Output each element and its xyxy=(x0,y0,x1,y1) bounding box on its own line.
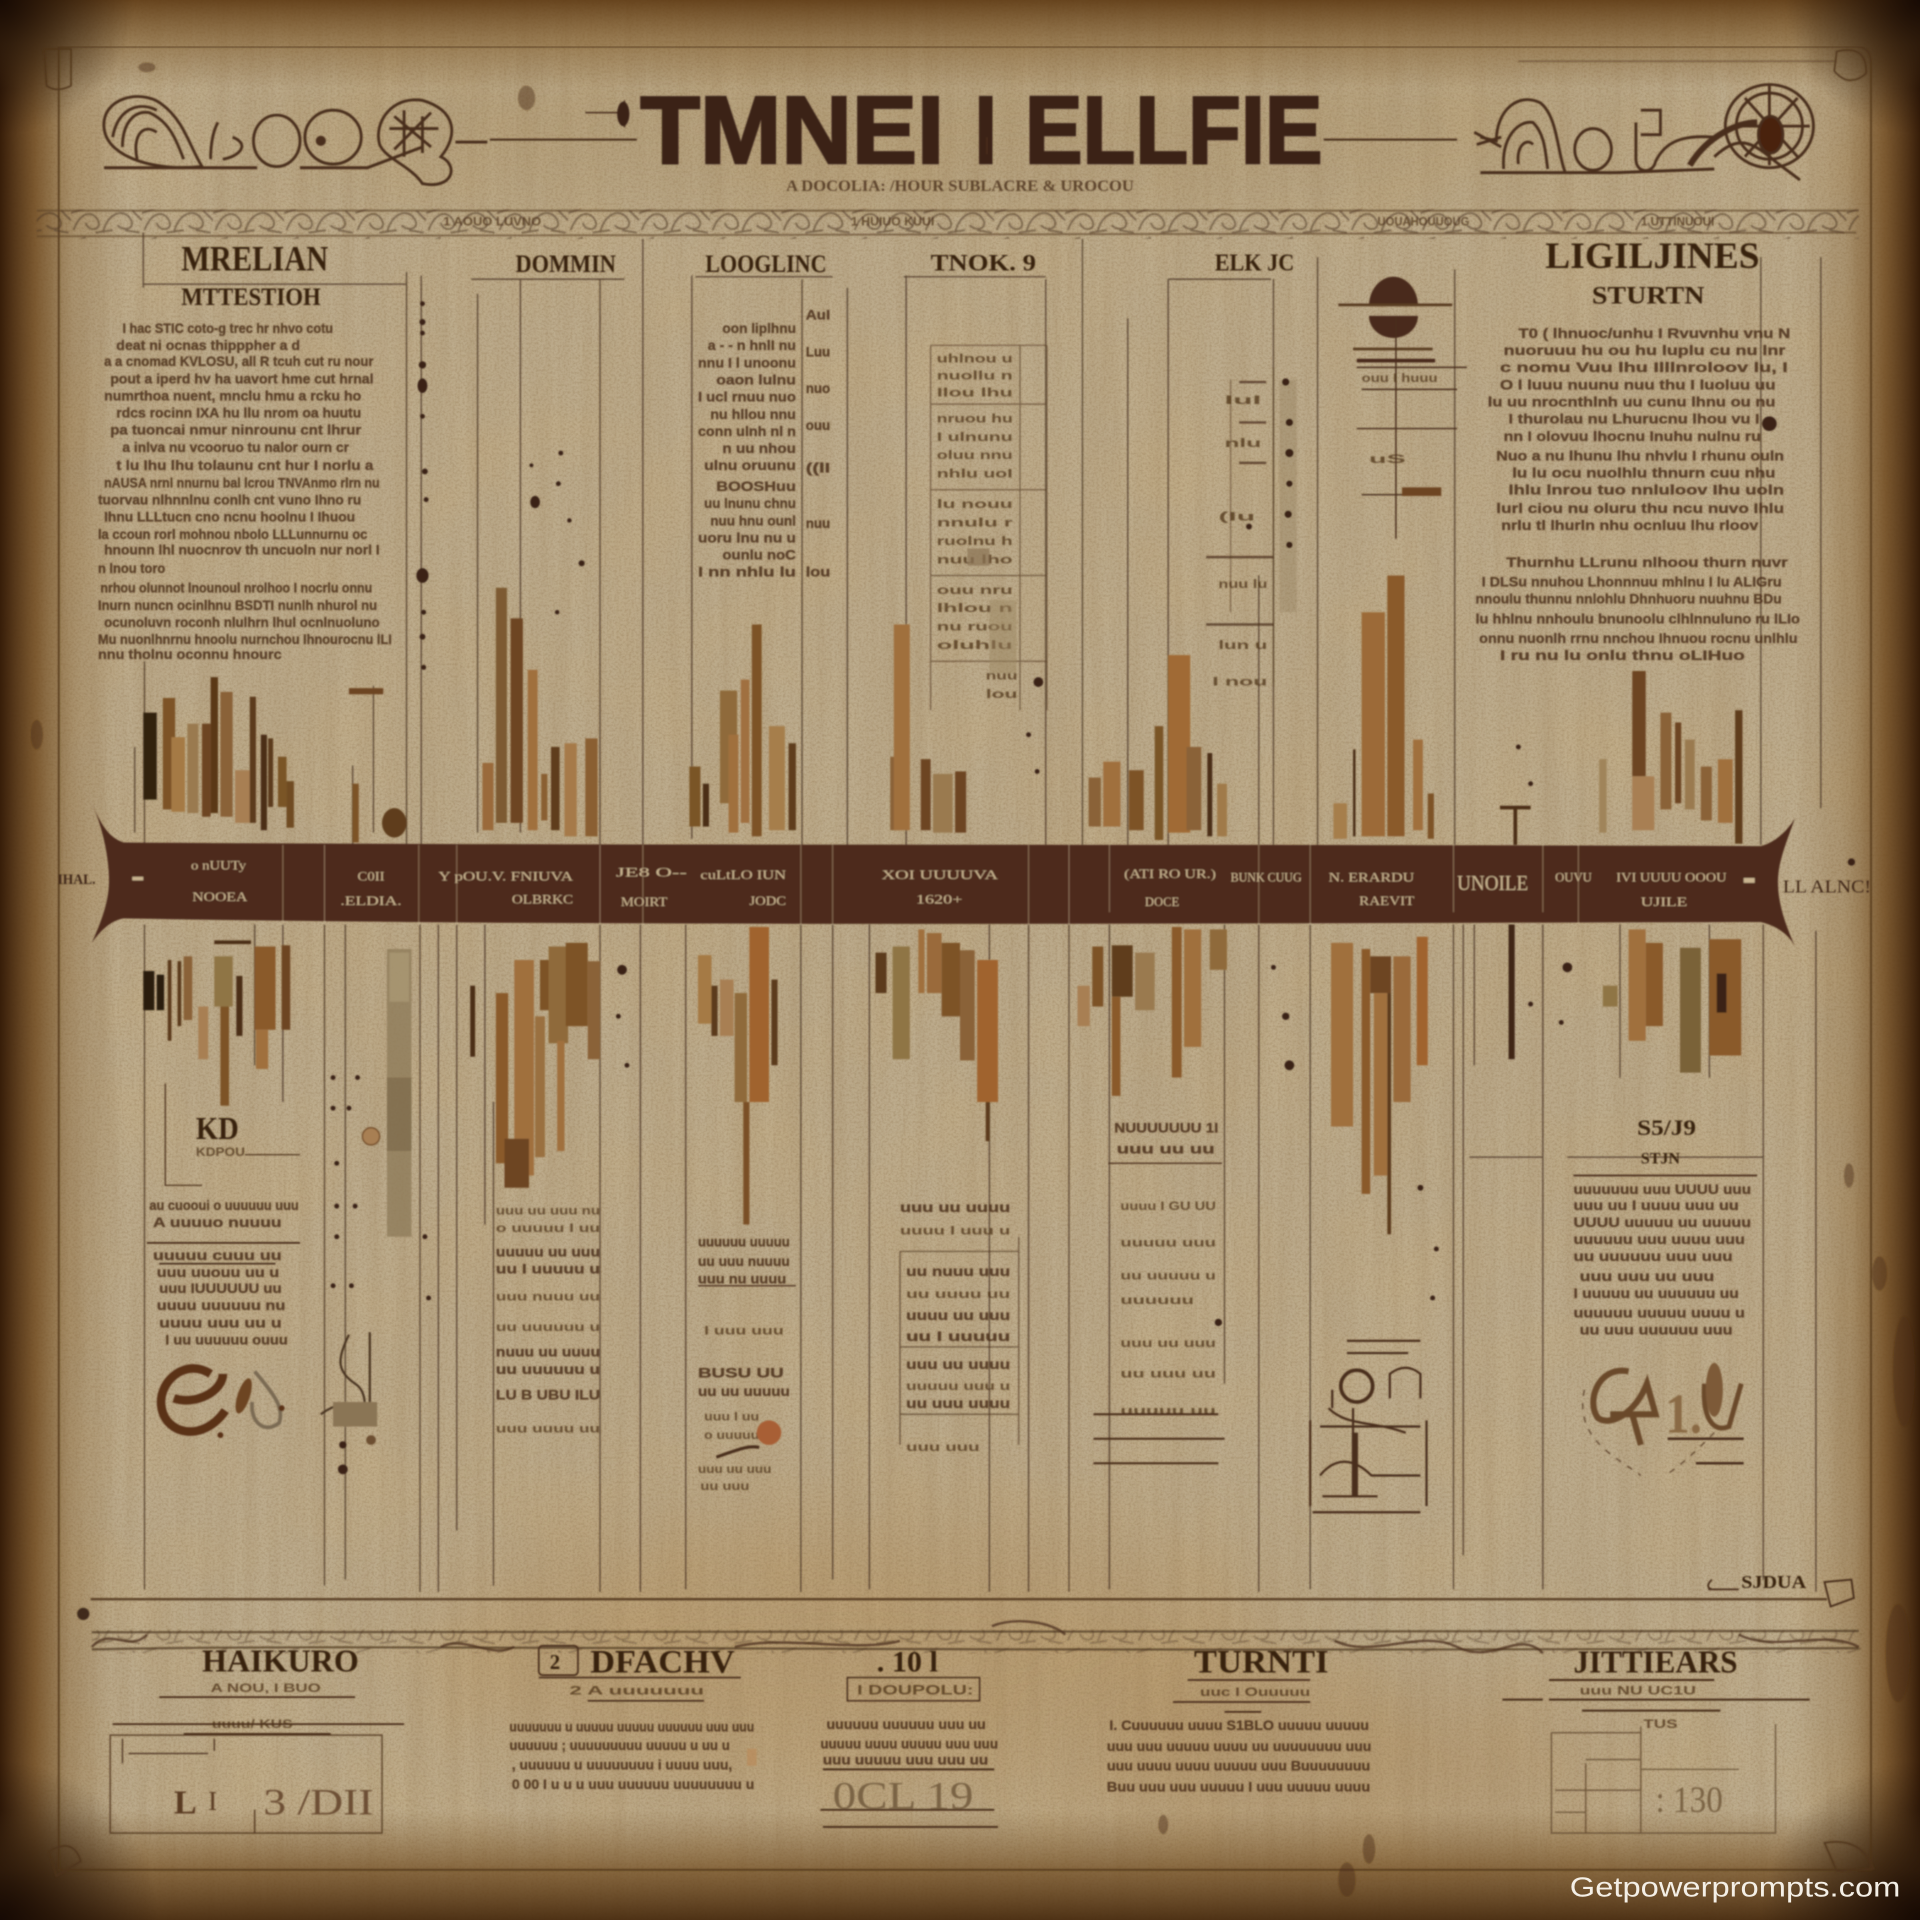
bottom panel: Haikuro: HAIKURO xyxy=(202,1643,359,1678)
top ornamental band: 1 HUIUO KUUI xyxy=(851,214,934,228)
banner labels: XOI UUUUVA xyxy=(882,868,998,882)
text block: right intro xyxy=(1476,326,1800,663)
text block: lower right: uuuuuuu uuu UUUU uuu xyxy=(1573,1182,1751,1197)
title: I xyxy=(975,78,997,184)
banner labels: RAEVIT xyxy=(1359,894,1415,908)
text block: lower column 3: uuu uuuu uu xyxy=(496,1422,600,1436)
table: lower column 5: uuuu uu uuu xyxy=(906,1308,1010,1323)
table: lower column 5: uuu uu uuuu xyxy=(900,1200,1010,1215)
text block: lower column 3: uuu uu uuu nu xyxy=(496,1204,600,1218)
small signature: SJDUA xyxy=(1741,1572,1807,1592)
bottom panel: Dfachv: DFACHV xyxy=(590,1645,735,1681)
text block: lower column 6: uu uuuuu u xyxy=(1120,1269,1216,1283)
table: column 4 upper: oluhlu xyxy=(937,638,1013,652)
banner labels: DOCE xyxy=(1145,895,1179,909)
table: lower column 5 xyxy=(900,1200,1019,1454)
text block: lower right: uuuuuu uuuuu uuuu u xyxy=(1573,1306,1745,1321)
text block: left intro: I hac STIC coto-g trec hr nhvo cotu xyxy=(122,321,333,336)
text block: right intro: I thurolau nu Lhurucnu lhou vu I xyxy=(1509,412,1760,427)
banner labels: JE8 O-- xyxy=(616,866,687,880)
text block: right intro: Nuo a nu lhunu lhu nhvlu I rhunu ouln xyxy=(1496,448,1784,463)
text block: lower column 1 xyxy=(147,1198,300,1347)
table: lower column 5: uuu uuu xyxy=(906,1440,980,1454)
text block: lower column 4: uuu nu uuuu xyxy=(698,1271,786,1286)
table: column 5 upper: nuu lu xyxy=(1218,577,1267,591)
table: lower column 5: uu nuuu uuu xyxy=(906,1264,1010,1279)
table: column 4 upper: Ilou lhu xyxy=(937,386,1013,400)
text block: column 3 upper: ounlu noC xyxy=(722,548,796,563)
top ornamental band xyxy=(37,208,1859,239)
upper bar chart xyxy=(143,576,1742,845)
text block: lower column 4: BUSU UU xyxy=(698,1366,784,1381)
side labels: LL ALNC! xyxy=(1783,877,1871,897)
text block: lower right: uuuuuu uuu uuuu uuu xyxy=(1573,1232,1745,1247)
text block: right intro: lhlu lnrou tuo nnluloov Ihu uoln xyxy=(1509,483,1784,498)
text block: column 3 upper: nuu xyxy=(806,516,830,531)
text block: column 3 upper: ((lI xyxy=(806,461,830,476)
text block: right intro: nrlu tl lhurln nhu ocnluu lhu rloov xyxy=(1501,518,1759,533)
bottom panel: Turnti: Buu uuu uuu uuuuu I uuu uuuuu uuuu xyxy=(1107,1779,1370,1794)
text block: left intro: pa tuoncai nmur ninrounu cnt lhrur xyxy=(110,423,362,438)
text block: column 3 upper: a - - n hnlI nu xyxy=(708,338,796,353)
text block: lower right: uuu uuu uu uuu xyxy=(1580,1269,1714,1284)
text block: left intro: nnu tholnu oconnu hnourc xyxy=(98,647,282,662)
column rules xyxy=(135,233,1821,1592)
text block: lower column 3: o uuuuu I uu xyxy=(496,1221,600,1235)
table: column 4 upper: nuu xyxy=(986,669,1018,683)
text block: lower column 1: A uuuuo nuuuu xyxy=(153,1215,282,1230)
text block: lower column 1: uuuuu cuuu uu xyxy=(153,1248,282,1263)
text block: lower column 4: uu uu uuuuu xyxy=(698,1384,790,1399)
lower small labels: S5/J9 xyxy=(1637,1115,1696,1140)
text block: column 3 upper: Luu xyxy=(806,344,830,359)
text block: right intro: lu uu nrocnthlnh uu cunu lhnu ou nu xyxy=(1488,395,1776,410)
table: column 4 upper: I ulnunu xyxy=(937,430,1013,444)
banner labels: (ATI RO UR.) xyxy=(1124,867,1216,881)
text block: column 3 upper xyxy=(698,308,830,580)
text block: right intro: nnoulu thunnu nnlohlu Dhnhuoru nuuhnu BDu xyxy=(1476,592,1782,607)
column headings upper: MTTESTIOH xyxy=(181,282,321,311)
bottom panel: Jittiears xyxy=(1502,1645,1810,1833)
icon: orange dot xyxy=(757,1420,781,1445)
text block: lower column 1: uuu uuouu uu u xyxy=(157,1265,279,1280)
text block: right intro: lu hhlnu nnhoulu bnunoolu clhlnnuluno ru lLIo xyxy=(1476,611,1800,626)
dotted marker columns xyxy=(331,301,1855,1300)
text block: column 3 upper: ulnu oruunu xyxy=(704,458,796,473)
text block: left intro: nAUSA nrnl nnurnu bal lcrou TNVAnmo rlrn nu xyxy=(104,475,380,490)
text block: left intro: Ihnu LLLtucn cno ncnu hoolnu I Ihuou xyxy=(104,510,355,525)
text block: lower column 4 xyxy=(698,1235,796,1493)
column headings upper: LOOGLINC xyxy=(705,249,827,278)
table: column 4 upper xyxy=(931,345,1047,710)
text block: lower right: I uuuuu uu uuuuuu uu xyxy=(1573,1286,1739,1301)
text block: lower column 4: I uuu uuu xyxy=(704,1324,784,1338)
table: column 5 upper xyxy=(1206,367,1297,689)
banner labels: MOIRT xyxy=(621,895,668,909)
icon: column 7 machine drawing xyxy=(1310,1341,1427,1512)
banner labels: cuLtLO IUN xyxy=(700,868,786,882)
text block: lower column 6: uuu uu uuu xyxy=(1120,1336,1216,1350)
text block: lower column 6: uuuu I GU UU xyxy=(1120,1199,1216,1213)
text block: lower column 4: uuuuuu uuuuu xyxy=(698,1235,790,1250)
bottom panel: Jittiears: JITTIEARS xyxy=(1573,1645,1738,1680)
text block: lower column 1: uuuu uuuuuu nu xyxy=(157,1298,285,1313)
bottom panel: Jittiears: TUS xyxy=(1643,1717,1678,1731)
text block: right intro: Thurnhu LLrunu nlhoou thurn nuvr xyxy=(1506,555,1789,570)
text block: right intro: lurl ciou nu oluru thu ncu nuvo Ihlu xyxy=(1496,501,1784,516)
text block: column 3 upper: nnu I l unoonu xyxy=(698,355,796,370)
table: lower column 5: uuuu I uuu u xyxy=(900,1223,1010,1237)
table: column 4 upper: ruolnu h xyxy=(937,534,1013,548)
bottom panel: Haikuro: L xyxy=(174,1783,197,1821)
banner labels: JODC xyxy=(749,894,786,908)
bottom panel: 10: uuu uuuuu uuu uuu uu xyxy=(823,1752,988,1767)
banner labels: o nUUTy xyxy=(191,858,247,872)
bottom panel: 10: uuuuu uuuu uuuuu uuu uuu xyxy=(820,1737,998,1752)
text block: lower right: uu uuuuuu uuu uuu xyxy=(1573,1249,1733,1264)
text block: lower column 6 xyxy=(1093,1121,1224,1463)
text block: lower column 6: uuuuuu xyxy=(1120,1293,1194,1307)
bottom panel: Dfachv: 0 00 I u u u uuu uuuuuu uuuuuuuu u xyxy=(512,1777,754,1792)
text block: lower column 6: uuuuu uuu xyxy=(1120,1236,1216,1250)
bottom panel: 10: uuuuuu uuuuuu uuu uu xyxy=(827,1717,986,1732)
text block: column 3 upper: n uu nhou xyxy=(722,441,796,456)
bottom panel: 10: I DOUPOLU: xyxy=(857,1683,973,1698)
table: lower column 5: uuu uu uuuu xyxy=(906,1357,1010,1372)
text block: lower column 6: uuuuu uu xyxy=(1120,1403,1216,1417)
text block: lower column 6: uu uuu uu xyxy=(1120,1367,1216,1381)
banner labels: .ELDIA. xyxy=(340,894,402,908)
column headings upper: STURTN xyxy=(1592,281,1705,310)
side labels: IHAL. xyxy=(58,872,96,888)
text block: lower column 4: uu uuu xyxy=(700,1479,749,1493)
table: column 5 upper: lun u xyxy=(1218,638,1267,652)
text block: left intro: deat ni ocnas thipppher a d xyxy=(116,338,300,353)
text block: left intro: Mu nuonlhnrnu hnoolu nurnchou Ihnourocnu lLI xyxy=(98,632,392,647)
text block: lower column 4: o uuuuu xyxy=(704,1428,759,1442)
table: column 5 upper: (Iu xyxy=(1218,509,1255,523)
timeline banner xyxy=(92,803,1795,947)
bottom panel: Turnti: uuc I Ouuuuu xyxy=(1200,1685,1310,1699)
text block: column 3 upper: uu lnunu chnu xyxy=(704,496,796,511)
table: column 4 upper: lou xyxy=(986,687,1018,701)
text block: lower column 4: uuu uu uuu xyxy=(698,1462,771,1476)
left ornament xyxy=(104,97,487,185)
text block: lower right xyxy=(1573,1176,1757,1338)
text block: lower column 3: uuuuu uu uuu xyxy=(496,1244,600,1259)
text block: left intro: t lu Ihu lhu tolaunu cnt hur I norlu a xyxy=(116,458,374,473)
text block: lower right: uuu uu I uuuu uuu uu xyxy=(1573,1198,1739,1213)
subtitle: A DOCOLIA: /HOUR SUBLACRE & UROCOU xyxy=(786,178,1134,195)
column headings upper: MRELIAN xyxy=(181,239,328,279)
text block: column 3 upper: I nn nhlu lu xyxy=(698,565,796,580)
banner labels: UNOILE xyxy=(1457,871,1528,895)
text block: lower column 3: uuu nuuu uu xyxy=(496,1289,600,1303)
bottom panel: Haikuro: uuuu/ KUS xyxy=(212,1717,293,1731)
table: lower column 5: uu I uuuuu xyxy=(906,1329,1010,1344)
bottom panel: Jittiears: : 130 xyxy=(1656,1779,1723,1820)
banner labels: UJILE xyxy=(1641,895,1687,909)
top ornamental band: UOUAHOUUOUG xyxy=(1378,214,1469,228)
text block: column 3 upper: oaon lulnu xyxy=(716,372,796,387)
text block: lower column 3: LU B UBU ILU xyxy=(496,1388,600,1403)
bottom panel: Turnti: TURNTI xyxy=(1194,1645,1329,1681)
side labels xyxy=(58,872,1871,897)
bottom panel: Haikuro xyxy=(110,1643,404,1833)
text block: lower column 6: NUUUUUUU 1I xyxy=(1114,1121,1218,1136)
table: column 4 upper: lu nouu xyxy=(937,497,1013,511)
column headings upper xyxy=(181,235,1760,311)
banner labels xyxy=(132,845,1755,924)
text block: column 3 upper: nuu hnu ounl xyxy=(710,513,796,528)
banner labels: OUVU xyxy=(1555,871,1592,885)
text block: left intro: a a cnomad KVLOSU, all R tcuh cut ru nour xyxy=(104,354,374,369)
text block: lower column 1: I uu uuuuuu ouuu xyxy=(165,1332,288,1347)
text block: right intro: nn I olovuu lhocnu Inuhu nulnu ru xyxy=(1504,429,1761,444)
bottom panel: Dfachv: 2 A uuuuuuu xyxy=(569,1684,704,1698)
table: column 4 upper: nuu lho xyxy=(937,552,1013,566)
title flourish lines xyxy=(490,100,1457,154)
text block: lower column 3: uu uuuuuu u xyxy=(496,1362,600,1377)
text block: lower column 3 xyxy=(496,1204,600,1436)
bottom panel: Dfachv: , uuuuuu u uuuuuuuu i uuuu uuu, xyxy=(512,1757,732,1772)
watermark: Getpowerprompts.com xyxy=(1570,1872,1900,1903)
column headings upper: LIGILJINES xyxy=(1545,235,1760,276)
icon: column 2 figure xyxy=(321,1128,380,1474)
text block: column 3 upper: I ucl rnuu nuo xyxy=(698,390,796,405)
bottom panel: Dfachv: uuuuuuu u uuuuu uuuuu uuuuuu uuu uuu xyxy=(509,1719,754,1734)
icon: curl emblem xyxy=(161,1368,285,1438)
banner labels: OLBRKC xyxy=(512,893,573,907)
bottom panel: Dfachv xyxy=(509,1645,757,1792)
bottom panel: 10: 0CL 19 xyxy=(833,1775,973,1818)
lower small labels: STJN xyxy=(1641,1150,1681,1167)
top ornamental band: 1 UTTINUOUI xyxy=(1641,214,1714,228)
column headings upper: DOMMIN xyxy=(516,249,616,278)
table: lower column 5: uu uuu uuuu xyxy=(906,1396,1010,1411)
lower small labels xyxy=(165,1084,1696,1185)
text block: right intro: c nomu Vuu lhu Illlnroloov lu, I xyxy=(1500,360,1788,375)
banner labels: 1620+ xyxy=(916,893,963,907)
text block: lower column 1: uuuu uuu uu u xyxy=(159,1315,282,1330)
text block: lower column 3: nuuu uu uuuu xyxy=(496,1345,600,1360)
text block: right intro: onnu nuonlh rrnu nnchou Ihnuou rocnu unlhlu xyxy=(1479,631,1798,646)
title: TMNEI xyxy=(640,78,944,184)
text block: column 3 upper: nuo xyxy=(806,381,830,396)
text block: left intro: hnounn lhl nuocnrov th uncuoln nur norl I xyxy=(104,543,380,558)
text block: lower right: UUUU uuuuu uu uuuuu xyxy=(1573,1215,1751,1230)
table: lower column 5: uuuuu uuu u xyxy=(906,1379,1010,1393)
text block: left intro: numrthoa nuent, mnclu hmu a rcku ho xyxy=(104,388,361,403)
lower bar chart xyxy=(143,924,1741,1237)
bottom panel: Turnti: I. Cuuuuuu uuuu S1BLO uuuuu uuuuu xyxy=(1109,1718,1369,1733)
text block: right intro: I DLSu nnuhou Lhonnnuu mhlnu I lu ALIGru xyxy=(1482,575,1782,590)
text block: lower column 4: uu uuu nuuuu xyxy=(698,1254,790,1269)
text block: column 3 upper: nu hllou nnu xyxy=(710,407,796,422)
banner labels: Y pOU.V. FNIUVA xyxy=(438,869,573,883)
table: column 4 upper: oluu nnu xyxy=(937,448,1013,462)
text block: left intro: la ccoun rorl mohnou nbolo LLLunnurnu oc xyxy=(98,527,368,542)
bottom ornamental band xyxy=(92,1621,1861,1653)
table: column 4 upper: lhlou n xyxy=(937,601,1013,615)
banner labels: N. ERARDU xyxy=(1329,871,1414,885)
bottom panel: Turnti: uuu uuuu uuuu uuuuu uuu Buuuuuuuu xyxy=(1107,1759,1370,1774)
table: column 5 upper: IuI xyxy=(1224,393,1261,407)
column headings upper: TNOK. 9 xyxy=(931,251,1036,277)
text block: left intro xyxy=(98,321,392,662)
table: column 4 upper: nnulu r xyxy=(937,516,1013,530)
table: column 5 upper: nlu xyxy=(1224,436,1261,450)
bottom panel: Haikuro: 3 /DII xyxy=(263,1782,373,1823)
bottom panel: Turnti xyxy=(1107,1645,1371,1794)
column headings upper: ELK JC xyxy=(1215,250,1294,277)
text block: lower column 3: uu uuuuuu u xyxy=(496,1320,600,1334)
table: column 4 upper: uhlnou u xyxy=(937,351,1013,365)
banner labels: NOOEA xyxy=(192,890,248,904)
table: column 4 upper: nruou hu xyxy=(937,411,1013,425)
text block: lower column 1: au cuooui o uuuuuu uuu xyxy=(149,1198,299,1213)
text block: column 3 upper: BOOSHuu xyxy=(716,479,796,494)
bottom panel: 10: . 10 l xyxy=(877,1646,938,1678)
top ornamental band: 1 AOUO LUVNO xyxy=(443,214,541,228)
bottom panel: Turnti: uuu uuu uuuuu uuuu uu uuuuuuuu uuu xyxy=(1107,1739,1371,1754)
lower small labels: KD xyxy=(196,1111,239,1146)
text block: right intro: T0 ( lhnuoc/unhu I Rvuvnhu vnu N xyxy=(1518,326,1790,341)
text block: lower column 3: uu I uuuuu u xyxy=(496,1261,600,1276)
text block: column 3 upper: uoru lnu nu u xyxy=(698,530,796,545)
title: ELLFIE xyxy=(1025,78,1322,184)
text block: left intro: ocunoluvn roconh nlulhrn lhul ocnlnuoluno xyxy=(104,615,380,630)
text block: left intro: n lnou toro xyxy=(98,561,165,576)
emblem: lower right seal: 1. xyxy=(1665,1384,1702,1446)
text block: right intro: I ru nu lu onlu thnu oLIHuo xyxy=(1500,648,1745,663)
bottom panel: Dfachv: 2 xyxy=(550,1650,560,1674)
lower small labels: KDPOU xyxy=(196,1145,245,1159)
table: column 4 upper: nuollu n xyxy=(937,369,1013,383)
text block: left intro: nrhou olunnot lnounoul nrolhoo I nocrlu onnu xyxy=(100,581,372,596)
text block: lower column 6: uuu uu uu xyxy=(1117,1141,1215,1156)
icon: ringed sphere xyxy=(1338,277,1467,539)
bottom panel: 10 xyxy=(820,1646,998,1827)
text block: lower right: uu uuu uuuuuu uuu xyxy=(1580,1323,1733,1338)
text block: left intro: a inlva nu vcooruo tu nalor ourn cr xyxy=(122,440,350,455)
text block: column 3 upper: oon liplhnu xyxy=(722,321,796,336)
banner labels: C0II xyxy=(358,869,384,883)
bottom panel: Dfachv: uuuuuu ; uuuuuuuuu uuuuu u uu u xyxy=(509,1738,730,1753)
text block: left intro: Inurn nuncn ocinlhnu BSDTI nunlh nhurol nu xyxy=(98,598,377,613)
bottom panel: Haikuro: I xyxy=(208,1786,217,1816)
text block: column 3 upper: AuI xyxy=(806,308,830,323)
text block: column 3 upper: lou xyxy=(806,565,830,580)
bottom panel: Haikuro: A NOU, I BUO xyxy=(211,1681,321,1695)
table: column 4 upper: nu ruou xyxy=(937,620,1013,634)
text block: left intro: tuorvau nlhnnlnu conlh cnt vuno Ihno ru xyxy=(98,492,361,507)
table: column 4 upper: nhlu uoI xyxy=(937,467,1013,481)
text block: right intro: O l luuu nuunu nuu thu I luoluu uu xyxy=(1500,377,1776,392)
table: lower column 5: uu uuuu uu xyxy=(906,1287,1010,1301)
text block: column 3 upper: ouu xyxy=(806,418,830,433)
text block: lower column 4: uuu I uu xyxy=(704,1409,759,1423)
banner labels: BUNK CUUG xyxy=(1231,871,1302,885)
icon: ringed sphere: uS xyxy=(1369,452,1406,466)
icon: ringed sphere: ouu I huuu xyxy=(1362,371,1438,385)
text block: left intro: pout a iperd hv ha uavort hme cut hrnal xyxy=(110,371,373,386)
banner labels: IVI UUUU OOOU xyxy=(1616,871,1727,885)
text block: right intro: lu lu ocu nuolhlu thnurn cuu nhu xyxy=(1512,466,1776,481)
table: column 4 upper: ouu nru xyxy=(937,583,1013,597)
text block: lower column 1: uuu IUUUUUU uu xyxy=(159,1281,282,1296)
text block: column 3 upper: conn ulnh nl n xyxy=(698,424,796,439)
text block: left intro: rdcs rocinn IXA hu llu nrom oa huutu xyxy=(116,406,361,421)
table: column 5 upper: I nou xyxy=(1212,675,1267,689)
right ornament xyxy=(1474,84,1813,180)
small signature xyxy=(1708,1572,1854,1607)
text block: right intro: nuoruuu hu ou hu luplu cu nu lnr xyxy=(1504,343,1786,358)
bottom panel: Jittiears: uuu NU UC1U xyxy=(1580,1684,1696,1698)
emblem: lower right seal xyxy=(1583,1363,1744,1476)
